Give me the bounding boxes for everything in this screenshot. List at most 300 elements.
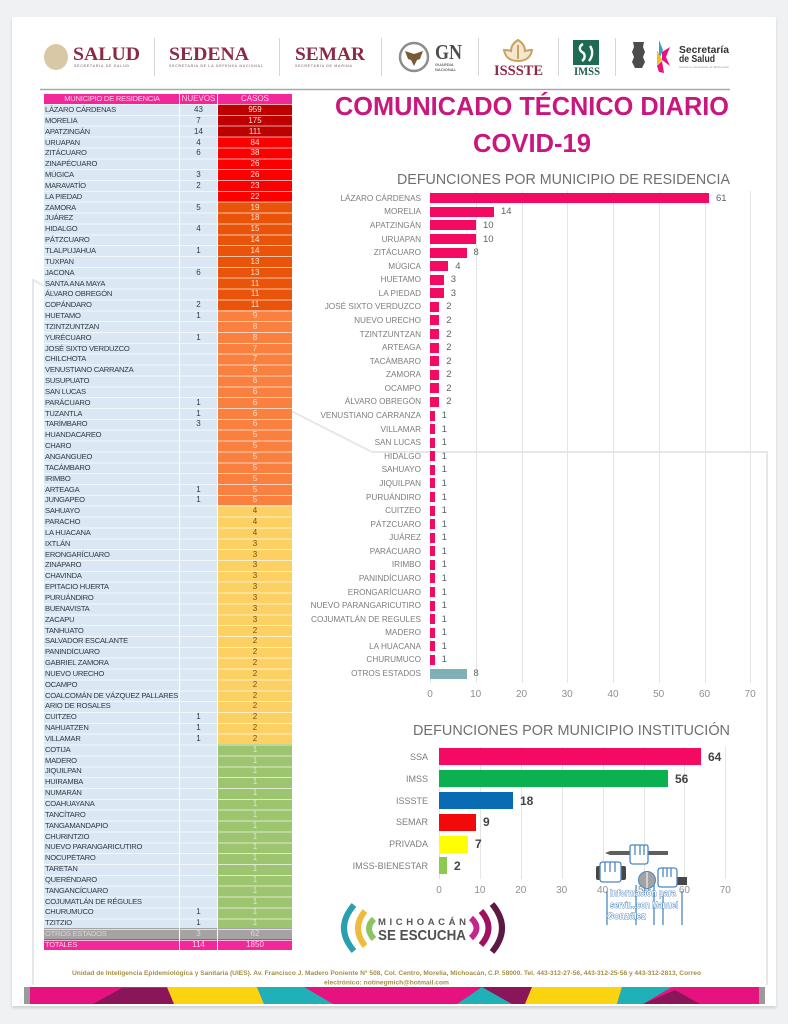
table rows: yellow tier: PANINDÍCUARO <box>45 647 100 656</box>
bars and labels: 1 <box>442 654 447 665</box>
table rows: orange tier: 3 <box>196 419 201 428</box>
bars and labels: 1 <box>442 546 447 557</box>
x axis ticks: 20 <box>515 885 526 896</box>
bars and labels: URUAPAN <box>382 235 421 244</box>
table rows: yellow tier: PURUÁNDIRO <box>45 593 94 602</box>
table rows: green tier: 1 <box>253 821 257 830</box>
table rows: orange tier: 7 <box>253 344 257 353</box>
bars and labels: IMSS-BIENESTAR <box>353 861 428 871</box>
table rows: orange tier: 1 <box>196 409 201 418</box>
table rows: orange tier: 5 <box>253 441 257 450</box>
table rows: green tier: TZITZIO <box>45 918 72 927</box>
bars and labels: 4 <box>455 261 461 272</box>
title: COMUNICADO TÉCNICO DIARIO <box>335 91 729 121</box>
watermark: fists and credit: servir...con Manuel <box>610 900 678 910</box>
table header: CASOS <box>241 94 269 103</box>
bars and labels: OCAMPO <box>385 384 421 393</box>
bars and labels: JUÁREZ <box>389 533 421 542</box>
table rows: yellow tier: 2 <box>253 636 257 645</box>
table rows: orange tier: 5 <box>253 463 257 472</box>
bars and labels: SAN LUCAS <box>375 438 421 447</box>
table rows: yellow tier: TANHUATO <box>45 626 84 634</box>
header logos <box>44 38 730 79</box>
table row: totals: TOTALES <box>45 940 77 949</box>
table rows: yellow tier: 4 <box>253 506 257 515</box>
bars and labels: 8 <box>474 668 479 679</box>
table rows: red tier: 23 <box>251 181 259 190</box>
table row: other states <box>44 928 292 939</box>
bars and labels: 1 <box>442 424 447 435</box>
title: COVID-19 <box>473 128 591 158</box>
table rows: red tier: 2 <box>196 181 201 190</box>
table rows: green tier: 1 <box>253 897 257 906</box>
table rows: orange tier: 9 <box>253 311 257 320</box>
table rows: dark orange tier: 5 <box>196 203 201 212</box>
bars and labels: 3 <box>451 288 456 299</box>
table rows: yellow tier: 2 <box>253 734 257 743</box>
logo: Sedena: SECRETARÍA DE LA DEFENSA NACIONAL <box>169 63 264 68</box>
table rows: green tier: TANCÍTARO <box>45 810 86 819</box>
header dividers and rule <box>40 38 730 90</box>
bars and labels: 1 <box>442 478 447 489</box>
table rows: dark orange tier: TLALPUJAHUA <box>45 246 96 255</box>
bars and labels: 1 <box>442 587 447 598</box>
table rows: yellow tier: 3 <box>253 550 257 559</box>
table rows: orange tier: 5 <box>253 452 257 461</box>
bars and labels: SSA <box>410 752 428 762</box>
table rows: orange tier: TACÁMBARO <box>45 463 90 472</box>
table rows: green tier: HUIRAMBA <box>45 777 83 786</box>
bars and labels: ÁLVARO OBREGÓN <box>345 397 421 406</box>
table rows: dark orange tier: JUÁREZ <box>45 213 73 222</box>
table rows: dark orange tier: COPÁNDARO <box>45 300 92 309</box>
table rows: dark orange tier: 19 <box>251 203 259 212</box>
bars and labels: 7 <box>475 837 482 851</box>
table rows: yellow tier: 2 <box>253 691 257 700</box>
x axis ticks: 40 <box>607 689 619 700</box>
bars and labels: 9 <box>483 815 490 829</box>
bars and labels: MORELIA <box>384 207 421 216</box>
bars and labels: IRIMBO <box>392 560 421 569</box>
table rows: highest tier: 43 <box>194 105 203 114</box>
table rows: dark orange tier: 14 <box>251 235 259 244</box>
x axis ticks: 0 <box>436 885 442 896</box>
bars and labels: 1 <box>442 573 447 584</box>
table: cases by municipality <box>44 94 292 950</box>
table rows: orange tier: ARTEAGA <box>45 485 79 494</box>
table rows: orange tier: ANGANGUEO <box>45 452 92 461</box>
table rows: green tier: 1 <box>253 853 257 862</box>
bars and labels: 1 <box>442 464 447 475</box>
logo: Salud: SECRETARÍA DE SALUD <box>74 63 129 68</box>
bars and labels: CUITZEO <box>385 506 421 515</box>
table rows: red tier: 3 <box>196 170 201 179</box>
table rows: yellow tier: 2 <box>253 658 257 667</box>
table rows: green tier: NUEVO PARANGARICUTIRO <box>45 842 142 851</box>
table rows: green tier: 1 <box>253 766 257 775</box>
bars and labels: 56 <box>675 772 688 786</box>
table rows: green tier: CHURUMUCO <box>45 907 93 916</box>
logo: Secretaría de Salud Michoacán <box>632 40 729 73</box>
logo: Sedena: SEDENA <box>169 44 249 65</box>
table rows: red tier: MÚGICA <box>45 170 74 179</box>
logo: IMSS: IMSS <box>574 64 600 78</box>
table rows: yellow tier: 2 <box>253 723 257 732</box>
bars and labels: CHURUMUCO <box>366 655 421 664</box>
table rows: yellow tier: 1 <box>196 712 201 721</box>
chart heading: deaths by municipality of residence: DEFUNCIONES POR MUNICIPIO DE RESIDENCIA <box>397 171 730 188</box>
bars and labels: IMSS <box>406 774 428 784</box>
table rows: yellow tier: SAHUAYO <box>45 506 80 515</box>
table rows: green tier: 1 <box>253 832 257 841</box>
table rows: green tier: TANGAMANDAPIO <box>45 821 108 830</box>
bars and labels: MADERO <box>385 628 421 637</box>
table rows: green tier: QUERÉNDARO <box>45 875 97 884</box>
table rows: orange tier <box>44 310 292 505</box>
bars and labels: JOSÉ SIXTO VERDUZCO <box>325 302 421 311</box>
bars and labels <box>311 193 727 679</box>
table rows: green tier: 1 <box>196 918 201 927</box>
bars and labels: 2 <box>446 383 451 394</box>
table rows: dark orange tier: 18 <box>251 213 259 222</box>
table rows: orange tier: 6 <box>253 387 257 396</box>
table rows: red tier: 22 <box>251 192 259 201</box>
table rows: orange tier: SUSUPUATO <box>45 376 89 385</box>
bars and labels: TACÁMBARO <box>370 357 421 366</box>
table rows: highest tier: 959 <box>248 105 262 114</box>
table rows: green tier: 1 <box>253 788 257 797</box>
table rows: dark orange tier: JACONA <box>45 268 74 277</box>
table rows: dark orange tier: PÁTZCUARO <box>45 235 90 244</box>
table rows: green tier: 1 <box>253 745 257 754</box>
bars and labels: 1 <box>442 641 447 652</box>
table rows: yellow tier: LA HUACANA <box>45 528 91 537</box>
bars and labels: 8 <box>474 247 479 258</box>
table rows: orange tier: 1 <box>196 311 201 320</box>
table rows: dark orange tier: 2 <box>196 300 201 309</box>
table rows: dark orange tier: 4 <box>196 224 201 233</box>
table rows: orange tier: SAN LUCAS <box>45 387 86 396</box>
logo: Secretaría de Salud Michoacán: Gobierno del Estado de Michoacán <box>679 65 729 69</box>
table rows: dark orange tier: 14 <box>251 246 259 255</box>
table rows: yellow tier: 4 <box>253 517 257 526</box>
bars and labels: 1 <box>442 410 447 421</box>
table row: other states: OTROS ESTADOS <box>45 929 107 938</box>
x axis ticks: 40 <box>597 885 608 896</box>
x axis ticks: 60 <box>679 885 690 896</box>
table rows: green tier: COTIJA <box>45 745 71 754</box>
table rows: orange tier: 5 <box>253 474 257 483</box>
bars and labels: OTROS ESTADOS <box>351 669 421 678</box>
table rows: orange tier: JOSÉ SIXTO VERDUZCO <box>45 344 130 353</box>
bars and labels: 64 <box>708 750 721 764</box>
table rows: dark orange tier <box>44 202 292 310</box>
bars and labels: SEMAR <box>396 817 428 827</box>
bars and labels: PÁTZCUARO <box>370 520 421 529</box>
table rows: green tier: TANGANCÍCUARO <box>45 886 108 895</box>
table rows: green tier: MADERO <box>45 756 77 765</box>
table rows: dark orange tier: 13 <box>251 257 259 266</box>
table rows: orange tier: 7 <box>253 354 257 363</box>
bars and labels: 1 <box>442 451 447 462</box>
table rows: red tier: URUAPAN <box>45 138 80 147</box>
bars and labels: JIQUILPAN <box>379 479 421 488</box>
title <box>335 91 729 158</box>
table rows: orange tier: YURÉCUARO <box>45 333 91 342</box>
table rows: dark orange tier: ZAMORA <box>45 203 76 212</box>
bars and labels: 1 <box>442 437 447 448</box>
table rows: yellow tier: NAHUATZEN <box>45 723 89 732</box>
bars and labels: PURUÁNDIRO <box>366 492 421 502</box>
footer colour band <box>24 987 765 1004</box>
bars and labels: HIDALGO <box>384 452 421 461</box>
bars and labels: 1 <box>442 532 447 543</box>
bars and labels: 1 <box>442 600 447 611</box>
table rows: orange tier: 5 <box>253 430 257 439</box>
table header: MUNICIPIO DE RESIDENCIA <box>64 94 160 103</box>
logo: Michoacán se escucha: SE ESCUCHA <box>378 927 466 944</box>
bars and labels: 1 <box>442 492 447 502</box>
table rows: yellow tier: 3 <box>253 539 257 548</box>
table rows: orange tier: 1 <box>196 398 201 407</box>
bars and labels: TZINTZUNTZAN <box>360 330 421 339</box>
table rows: yellow tier: 2 <box>253 701 257 710</box>
table rows: green tier: NOCUPÉTARO <box>45 853 96 862</box>
table rows: red tier: 4 <box>196 138 201 147</box>
table rows: yellow tier: SALVADOR ESCALANTE <box>45 636 128 645</box>
bars and labels: 2 <box>446 356 451 367</box>
table rows: orange tier: TARÍMBARO <box>45 419 87 428</box>
bar chart: deaths by municipality of residence <box>311 191 756 700</box>
table rows: red tier <box>44 137 292 202</box>
table rows: dark orange tier: HIDALGO <box>45 224 77 233</box>
bars and labels: 2 <box>446 315 451 326</box>
footer text <box>72 969 701 986</box>
table rows: yellow tier: 3 <box>253 593 257 602</box>
table rows: yellow tier: IXTLÁN <box>45 539 70 548</box>
table rows: red tier: 26 <box>251 159 259 168</box>
watermark: fists and credit <box>596 844 687 925</box>
table rows: orange tier: 5 <box>253 495 257 504</box>
table rows: dark orange tier: TUXPAN <box>45 257 74 266</box>
table rows: yellow tier: 3 <box>253 615 257 624</box>
bars and labels: VENUSTIANO CARRANZA <box>320 411 421 420</box>
bars and labels: PRIVADA <box>389 839 428 849</box>
table rows: red tier: MARAVATÍO <box>45 181 86 190</box>
table rows: green tier: 1 <box>253 886 257 895</box>
table rows: green tier: CHURINTZIO <box>45 832 89 841</box>
table rows: green tier: COAHUAYANA <box>45 799 95 808</box>
footer text: Unidad de Inteligencia Epidemiológica y Sanitaria (UIES). Av. Francisco J. Madero Poniente N° 508, Col. Centro, Morelia, Michoacán, C.P. 58000. Tel. 443-312-27-56, 443-312-25-56 y 443-312-2813, Correo <box>72 969 701 977</box>
table rows: yellow tier: ARIO DE ROSALES <box>45 701 110 710</box>
table rows: orange tier: TUZANTLA <box>45 409 82 418</box>
bars and labels: 1 <box>442 614 447 625</box>
bars and labels: 10 <box>483 234 494 245</box>
table rows: orange tier: 8 <box>253 333 257 342</box>
table rows: orange tier: JUNGAPEO <box>45 495 85 504</box>
table rows: green tier: 1 <box>253 907 257 916</box>
x axis ticks <box>427 689 756 700</box>
table rows: highest tier: 175 <box>248 116 262 125</box>
table rows: green tier: 1 <box>253 842 257 851</box>
table rows: green tier: 1 <box>253 918 257 927</box>
x axis ticks: 20 <box>516 689 527 700</box>
bars and labels: 18 <box>520 794 533 808</box>
table rows: green tier: 1 <box>196 907 201 916</box>
bars and labels: HUETAMO <box>381 275 421 284</box>
table rows: yellow tier: 3 <box>253 582 257 591</box>
bars and labels: 1 <box>442 519 447 530</box>
bars and labels: 2 <box>446 396 451 407</box>
table rows: yellow tier: ZINÁPARO <box>45 560 81 569</box>
table rows: orange tier: 1 <box>196 333 201 342</box>
x axis ticks: 60 <box>699 689 710 700</box>
bars and labels: LÁZARO CÁRDENAS <box>340 194 421 203</box>
logo: Guardia Nacional: NACIONAL <box>435 67 457 72</box>
bars and labels: 10 <box>483 220 494 231</box>
x axis ticks: 70 <box>745 689 756 700</box>
table row: totals: 114 <box>192 940 205 949</box>
table rows: orange tier: TZINTZUNTZAN <box>45 322 99 331</box>
table rows: orange tier: 6 <box>253 376 257 385</box>
table rows: yellow tier <box>44 505 292 744</box>
table rows: dark orange tier: 6 <box>196 268 201 277</box>
x axis ticks: 10 <box>470 689 481 700</box>
x axis ticks: 50 <box>638 885 649 896</box>
table rows: orange tier: 6 <box>253 419 257 428</box>
bars and labels: LA HUACANA <box>369 642 421 651</box>
bars and labels: 2 <box>454 859 461 873</box>
bars and labels: 1 <box>442 627 447 638</box>
x axis ticks: 0 <box>427 689 433 700</box>
bars and labels: NUEVO PARANGARICUTIRO <box>311 601 421 610</box>
table rows: green tier: NUMARÁN <box>45 788 82 797</box>
table rows: yellow tier: COALCOMÁN DE VÁZQUEZ PALLARES <box>45 691 178 700</box>
watermark: fists and credit: González <box>607 911 646 921</box>
table rows: orange tier: VENUSTIANO CARRANZA <box>45 365 134 374</box>
bars and labels: 2 <box>446 342 451 353</box>
logo: Guardia Nacional: GN <box>435 40 462 64</box>
chart heading: deaths by institution: DEFUNCIONES POR MUNICIPIO INSTITUCIÓN <box>413 722 730 739</box>
watermark: fists and credit: Información para <box>610 888 677 898</box>
table rows: green tier <box>44 744 292 928</box>
table rows: yellow tier: ERONGARÍCUARO <box>45 550 110 559</box>
table rows: green tier: 1 <box>253 756 257 765</box>
table rows: highest tier: APATZINGÁN <box>45 127 90 136</box>
table rows: dark orange tier: 1 <box>196 246 201 255</box>
bars and labels: 61 <box>716 193 727 204</box>
bars and labels: LA PIEDAD <box>379 289 421 298</box>
table rows: yellow tier: PARACHO <box>45 517 80 526</box>
table rows: yellow tier: 3 <box>253 560 257 569</box>
table rows: dark orange tier: SANTA ANA MAYA <box>45 278 105 288</box>
table rows: green tier: 1 <box>253 864 257 873</box>
bars and labels: ERONGARÍCUARO <box>348 588 421 597</box>
table rows: green tier: 1 <box>253 875 257 884</box>
table rows: yellow tier: GABRIEL ZAMORA <box>45 658 109 667</box>
logo: Michoacán se escucha <box>340 902 506 954</box>
x axis ticks <box>436 885 731 896</box>
table rows: green tier: COJUMATLÁN DE RÉGULES <box>45 897 142 906</box>
table rows: yellow tier: BUENAVISTA <box>45 604 89 613</box>
table rows: orange tier: 1 <box>196 485 201 494</box>
bars and labels: SAHUAYO <box>382 465 421 474</box>
table rows: red tier: ZINAPÉCUARO <box>45 159 97 168</box>
bars and labels: 2 <box>446 329 451 340</box>
logo: Salud: SALUD <box>73 44 140 65</box>
table row: other states: 3 <box>196 929 201 938</box>
x axis ticks: 10 <box>474 885 485 896</box>
table rows: orange tier: 8 <box>253 322 257 331</box>
logo: IMSS <box>573 40 600 78</box>
x axis ticks: 50 <box>653 689 664 700</box>
table rows: orange tier: 1 <box>196 495 201 504</box>
table header: NUEVOS <box>182 94 215 103</box>
table rows: red tier: 26 <box>251 170 259 179</box>
footer text: electrónico: notinegmich@hotmail.com <box>324 980 449 986</box>
table rows: dark orange tier: 13 <box>251 268 259 277</box>
bars and labels: APATZINGÁN <box>370 221 421 230</box>
bar chart: deaths by institution <box>353 747 731 896</box>
bars and labels: ISSSTE <box>396 796 428 806</box>
table rows: green tier: 1 <box>253 810 257 819</box>
table rows: orange tier: 5 <box>253 485 257 494</box>
table rows: yellow tier: 2 <box>253 712 257 721</box>
table rows: dark orange tier: 11 <box>251 278 259 288</box>
table rows: orange tier: 6 <box>253 398 257 407</box>
table rows: orange tier: CHILCHOTA <box>45 354 86 363</box>
bars and labels: 2 <box>446 301 451 312</box>
table rows: green tier: JIQUILPAN <box>45 766 81 775</box>
bars and labels: ZAMORA <box>386 370 421 379</box>
table rows: highest tier: 7 <box>196 116 201 125</box>
table rows: yellow tier: EPITACIO HUERTA <box>45 582 109 591</box>
bars and labels: VILLAMAR <box>380 425 421 434</box>
bars and labels: COJUMATLÁN DE REGULES <box>311 615 421 624</box>
bars and labels: 1 <box>442 505 447 516</box>
bars and labels: PANINDÍCUARO <box>359 574 421 583</box>
table rows: yellow tier: 3 <box>253 604 257 613</box>
table rows: yellow tier: VILLAMAR <box>45 734 81 743</box>
table rows: highest tier <box>44 104 292 137</box>
bars and labels: MÚGICA <box>388 262 421 271</box>
table rows: yellow tier: 2 <box>253 626 257 634</box>
table rows: orange tier: HUETAMO <box>45 311 81 320</box>
table rows: highest tier: 14 <box>194 127 203 136</box>
bars and labels: ZITÁCUARO <box>374 248 421 257</box>
bars and labels: 1 <box>442 559 447 570</box>
table rows: highest tier: LÁZARO CÁRDENAS <box>45 105 116 114</box>
table rows: yellow tier: 3 <box>253 571 257 580</box>
logo: ISSSTE: ISSSTE <box>494 63 543 79</box>
table rows: orange tier: IRIMBO <box>45 474 71 483</box>
table rows: green tier: 1 <box>253 799 257 808</box>
table rows: dark orange tier: 11 <box>251 300 259 309</box>
bars and labels <box>353 748 722 874</box>
table rows: red tier: ZITÁCUARO <box>45 148 87 157</box>
bars and labels: NUEVO URECHO <box>354 316 421 325</box>
table rows: red tier: LA PIEDAD <box>45 192 82 201</box>
table rows: yellow tier: 4 <box>253 528 257 537</box>
x axis ticks: 30 <box>562 689 573 700</box>
logo: Michoacán se escucha: MICHOACÁN <box>378 917 466 928</box>
table rows: yellow tier: CUITZEO <box>45 712 77 721</box>
table rows: dark orange tier: ÁLVARO OBREGÓN <box>45 289 112 298</box>
table rows: green tier: 1 <box>253 777 257 786</box>
bars and labels: 14 <box>501 206 512 217</box>
table rows: yellow tier: 1 <box>196 723 201 732</box>
table rows: yellow tier: 2 <box>253 669 257 678</box>
